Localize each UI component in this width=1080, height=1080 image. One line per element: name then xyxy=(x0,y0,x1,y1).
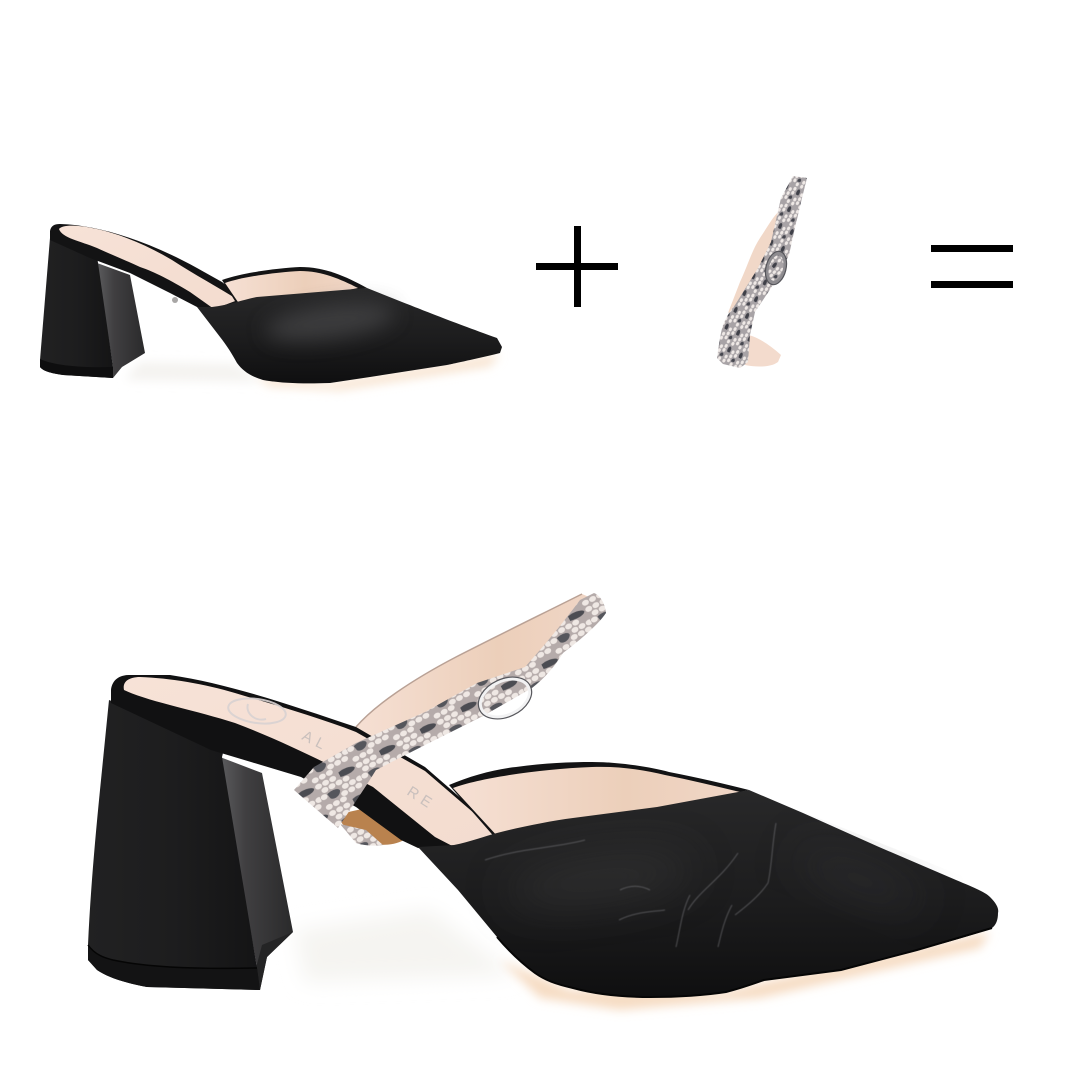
small sole pin xyxy=(172,297,178,303)
vamp creases xyxy=(485,823,776,947)
floor shadow xyxy=(295,910,515,982)
insole logo xyxy=(227,695,287,727)
strap accessory tab xyxy=(745,335,781,367)
vamp xyxy=(418,790,998,997)
small vamp highlight xyxy=(263,296,397,348)
heel inner face xyxy=(220,757,293,990)
vamp sheen xyxy=(503,845,697,915)
small lining xyxy=(225,271,358,305)
sole band xyxy=(111,675,494,852)
strap accessory lining xyxy=(728,210,780,313)
lining xyxy=(453,767,740,838)
large shoe with strap: RE xyxy=(404,783,439,814)
large shoe with strap xyxy=(88,593,998,1010)
small shoe floor shadow xyxy=(125,362,262,382)
strap snakeskin band xyxy=(294,593,606,828)
plus sign icon xyxy=(536,226,618,307)
heel foot xyxy=(88,945,260,990)
opening edge xyxy=(449,762,749,840)
vamp sole edge xyxy=(497,928,992,997)
sole glow xyxy=(500,932,990,1010)
small opening edge xyxy=(222,267,367,306)
insole xyxy=(124,677,496,850)
equals sign icon xyxy=(931,245,1013,288)
heel body xyxy=(88,700,260,990)
strap lining stitching xyxy=(356,594,582,727)
strap accessory xyxy=(717,176,807,368)
small insole xyxy=(59,226,238,309)
small shoe sole glow xyxy=(255,354,500,390)
strap under-tab xyxy=(335,805,404,845)
small shoe xyxy=(40,224,502,390)
small heel body xyxy=(40,238,113,378)
strap accessory band xyxy=(717,176,807,368)
small sole band xyxy=(50,224,245,310)
small heel inner face xyxy=(97,263,145,378)
strap back lining xyxy=(352,594,596,745)
strap buckle xyxy=(472,669,538,727)
strap accessory buckle xyxy=(762,249,790,287)
small vamp xyxy=(197,288,502,383)
insole brand text: AL xyxy=(299,727,332,755)
